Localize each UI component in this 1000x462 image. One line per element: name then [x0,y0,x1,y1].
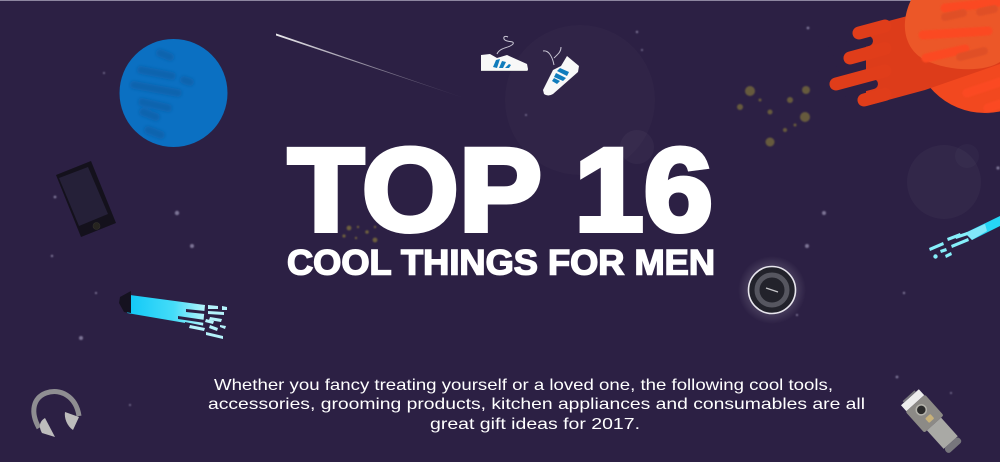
icon: left sneaker [481,36,528,71]
planet stripes [134,53,190,135]
icon: electric shaver [899,387,965,456]
comet right [929,216,1000,259]
shooting star streak [276,34,470,100]
comet beam [965,216,1000,240]
stars [51,27,1000,406]
golden dust cluster by title [342,226,377,242]
planet body [913,0,1000,113]
icon: smartphone [56,161,116,237]
comet left [119,291,227,339]
comet notches [178,309,205,329]
comet beam [127,295,205,326]
icon: wireless charger [738,256,806,324]
faint background circles [505,25,981,219]
intro paragraph: accessories, grooming products, kitchen appliances and consumables are all [208,396,865,413]
comet streaks [189,305,227,339]
comet streaks [929,232,969,259]
golden dust cluster top right [737,86,810,146]
intro paragraph: Whether you fancy treating yourself or a loved one, the following cool tools, [214,377,833,394]
icon: right sneaker [543,47,579,96]
title: TOP 16 [288,124,713,256]
subtitle: COOL THINGS FOR MEN [287,243,715,282]
icon: headphones [34,392,79,437]
planet upper cap [905,0,1000,69]
red planet with trail [815,0,1000,113]
blue planet [120,39,228,147]
comet head [119,291,131,313]
intro paragraph: great gift ideas for 2017. [430,416,640,433]
intro paragraph [208,377,865,433]
trail body [866,14,1000,106]
planet stripes [923,2,1000,108]
